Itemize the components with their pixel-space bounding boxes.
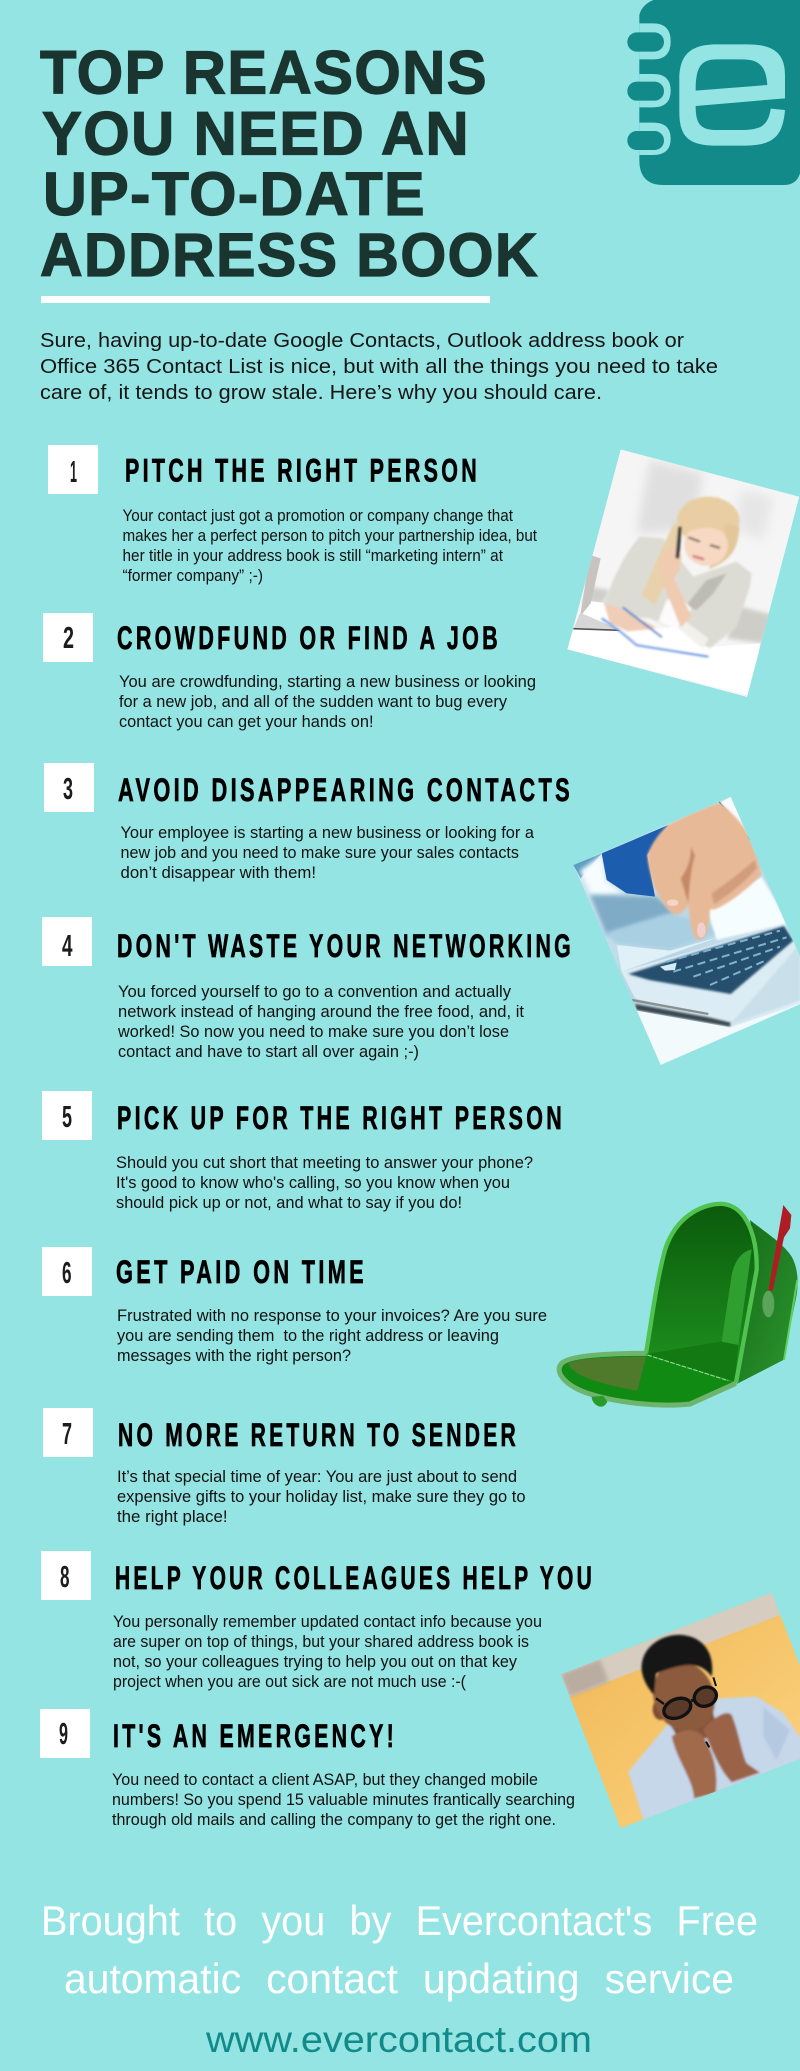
body 8: You personally remember updated contact info because you <box>113 1613 542 1631</box>
number badge 4: 4 <box>62 929 73 963</box>
number badge 8: 8 <box>60 1560 70 1594</box>
body 2 <box>119 673 536 731</box>
intro text <box>40 330 718 404</box>
body 1 <box>122 507 537 585</box>
body 8 <box>113 1613 542 1691</box>
heading 7: NO MORE RETURN TO SENDER <box>118 1417 519 1453</box>
title: ADDRESS BOOK <box>40 221 539 289</box>
title: UP-TO-DATE <box>43 160 426 228</box>
body 7: expensive gifts to your holiday list, make sure they go to <box>117 1488 526 1506</box>
photo: woman on the phone <box>567 449 799 697</box>
body 3 <box>120 824 535 882</box>
number badge 2: 2 <box>63 621 74 655</box>
reason 7 <box>43 1408 526 1526</box>
reason 1 <box>48 445 537 585</box>
body 1: Your contact just got a promotion or company change that <box>122 507 513 525</box>
heading 3: AVOID DISAPPEARING CONTACTS <box>118 772 573 808</box>
title: YOU NEED AN <box>42 100 470 168</box>
body 5: It's good to know who's calling, so you know when you <box>116 1174 510 1192</box>
number badge 3 <box>44 763 94 812</box>
intro text: Office 365 Contact List is nice, but with all the things you need to take <box>40 356 718 378</box>
title <box>40 38 539 289</box>
body 5: Should you cut short that meeting to answer your phone? <box>116 1154 533 1172</box>
number badge 6: 6 <box>62 1256 72 1290</box>
reason 3 <box>44 763 573 882</box>
logo: Evercontact notebook icon <box>627 0 800 185</box>
number badge 3: 3 <box>63 772 73 806</box>
heading 4: DON'T WASTE YOUR NETWORKING <box>117 928 574 964</box>
intro text: Sure, having up-to-date Google Contacts, Outlook address book or <box>40 330 684 352</box>
photo: finger on laptop keyboard <box>573 797 800 1065</box>
reason 9 <box>40 1709 575 1829</box>
body 6: you are sending them to the right address or leaving <box>117 1327 499 1345</box>
number badge 8 <box>41 1551 91 1600</box>
number badge 2 <box>43 613 93 662</box>
body 2: for a new job, and all of the sudden want to bug every <box>119 693 508 711</box>
body 9: You need to contact a client ASAP, but they changed mobile <box>112 1771 538 1789</box>
number badge 6 <box>42 1247 92 1296</box>
number badge 1 <box>48 445 98 494</box>
illustration: green mailbox <box>559 1204 798 1407</box>
heading 1: PITCH THE RIGHT PERSON <box>125 453 480 489</box>
body 4: network instead of hanging around the free food, and, it <box>118 1003 524 1021</box>
body 8: are super on top of things, but your shared address book is <box>113 1633 529 1651</box>
body 1: makes her a perfect person to pitch your partnership idea, but <box>122 527 537 545</box>
number badge 5 <box>42 1091 92 1140</box>
title underline <box>41 296 490 303</box>
number badge 5: 5 <box>62 1100 72 1134</box>
reason 4 <box>42 917 574 1061</box>
footer message <box>41 1897 758 2002</box>
body 3: Your employee is starting a new business or looking for a <box>120 824 535 842</box>
body 5: should pick up or not, and what to say if you do! <box>116 1194 462 1212</box>
body 8: not, so your colleagues trying to help you out on that key <box>113 1653 518 1671</box>
photo: worried man biting nails <box>561 1593 800 1828</box>
title: TOP REASONS <box>40 38 488 106</box>
number badge 1: 1 <box>70 455 77 489</box>
body 9 <box>112 1771 575 1829</box>
footer message: Brought to you by Evercontact's Free <box>41 1897 758 1944</box>
footer message: automatic contact updating service <box>64 1955 734 2002</box>
heading 6: GET PAID ON TIME <box>116 1254 367 1290</box>
body 6: Frustrated with no response to your invoices? Are you sure <box>117 1307 547 1325</box>
number badge 9 <box>40 1709 90 1758</box>
number badge 9: 9 <box>59 1717 68 1751</box>
body 7 <box>117 1468 526 1526</box>
number badge 7: 7 <box>62 1417 72 1451</box>
body 9: through old mails and calling the company to get the right one. <box>112 1811 556 1829</box>
body 3: don’t disappear with them! <box>120 864 316 882</box>
reason 6 <box>42 1247 547 1365</box>
body 5 <box>116 1154 533 1212</box>
body 9: numbers! So you spend 15 valuable minutes frantically searching <box>112 1791 575 1809</box>
heading 9: IT'S AN EMERGENCY! <box>113 1718 397 1754</box>
body 4: worked! So now you need to make sure you don’t lose <box>117 1023 509 1041</box>
heading 2: CROWDFUND OR FIND A JOB <box>117 620 501 656</box>
body 4 <box>117 983 524 1061</box>
body 3: new job and you need to make sure your sales contacts <box>120 844 519 862</box>
reason 8 <box>41 1551 595 1691</box>
body 1: her title in your address book is still “marketing intern” at <box>122 547 503 565</box>
body 7: the right place! <box>117 1508 228 1526</box>
body 2: contact you can get your hands on! <box>119 713 374 731</box>
body 4: You forced yourself to go to a convention and actually <box>118 983 512 1001</box>
intro text: care of, it tends to grow stale. Here’s why you should care. <box>40 382 602 404</box>
body 7: It’s that special time of year: You are just about to send <box>117 1468 517 1486</box>
body 2: You are crowdfunding, starting a new business or looking <box>119 673 536 691</box>
heading 5: PICK UP FOR THE RIGHT PERSON <box>117 1100 565 1136</box>
footer website link: www.evercontact.com <box>205 2019 592 2060</box>
body 6: messages with the right person? <box>117 1347 351 1365</box>
body 8: project when you are out sick are not much use :-( <box>113 1673 466 1691</box>
reason 5 <box>42 1091 565 1212</box>
reason 2 <box>43 613 536 731</box>
body 6 <box>117 1307 547 1365</box>
number badge 7 <box>43 1408 93 1457</box>
body 1: “former company” ;-) <box>122 567 263 585</box>
body 4: contact and have to start all over again ;-) <box>118 1043 419 1061</box>
number badge 4 <box>42 917 92 966</box>
